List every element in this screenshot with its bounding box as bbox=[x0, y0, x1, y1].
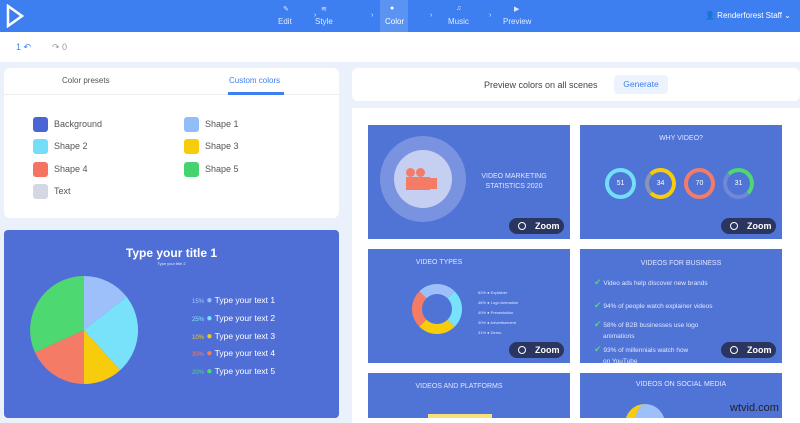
panel: pie preview: Type your title 1 bbox=[126, 246, 217, 260]
scene 1 bbox=[368, 125, 570, 239]
nav tabs: › bbox=[489, 12, 491, 19]
nav tabs: › bbox=[371, 12, 373, 19]
preview header: Preview colors on all scenes bbox=[484, 80, 598, 90]
scene 2: Zoom bbox=[747, 221, 772, 231]
panel: color settings: Shape 1 bbox=[205, 119, 239, 129]
toolbar undo/redo: ↷ 0 bbox=[52, 42, 67, 52]
nav tabs: Color bbox=[385, 17, 404, 26]
nav tabs: Music bbox=[448, 17, 469, 26]
scene 4: VIDEOS FOR BUSINESS bbox=[641, 260, 721, 267]
legend: 30% ● Type your text 4 bbox=[192, 348, 275, 359]
nav tabs: ✎ bbox=[283, 6, 289, 13]
panel: color settings: Background bbox=[54, 119, 102, 129]
header bar bbox=[0, 0, 800, 32]
nav tabs: ≋ bbox=[321, 6, 327, 13]
nav tabs: ♫ bbox=[456, 5, 461, 12]
panel: scenes bbox=[352, 108, 800, 423]
scene 3 bbox=[368, 249, 570, 363]
scene 6: VIDEOS ON SOCIAL MEDIA bbox=[636, 381, 726, 388]
scene 4: Zoom bbox=[747, 345, 772, 355]
scene 4: ✔ Video ads help discover new brands bbox=[594, 277, 708, 287]
toolbar undo/redo bbox=[0, 32, 800, 62]
toolbar undo/redo: 1 ↶ bbox=[16, 42, 31, 52]
scene 1: STATISTICS 2020 bbox=[486, 183, 542, 190]
panel: pie preview: Type your title 2 bbox=[157, 261, 186, 266]
nav tabs: › bbox=[314, 12, 316, 19]
scene 4: animations bbox=[603, 332, 634, 340]
scene 4: ✔ 58% of B2B businesses use logo bbox=[594, 319, 698, 329]
watermark: wtvid.com bbox=[730, 402, 779, 414]
preview header: Generate bbox=[623, 79, 659, 89]
scene 5 bbox=[368, 373, 570, 418]
user: 👤 Renderforest Staff ⌄ bbox=[705, 11, 791, 20]
legend bbox=[192, 295, 275, 377]
nav tabs: Preview bbox=[503, 17, 531, 26]
scene 3: 31% ● Demo bbox=[478, 330, 501, 335]
nav tabs: ▶ bbox=[514, 6, 519, 13]
scene 3: 62% ● Explainer bbox=[478, 290, 507, 295]
scene 5: VIDEOS AND PLATFORMS bbox=[416, 383, 502, 390]
legend: 20% ● Type your text 5 bbox=[192, 366, 275, 377]
panel: color settings: Shape 3 bbox=[205, 141, 239, 151]
scene 2: 70 bbox=[696, 180, 703, 187]
panel: pie preview bbox=[4, 230, 339, 418]
scene 2 bbox=[580, 125, 782, 239]
pie chart bbox=[30, 276, 138, 384]
panel: color settings: Shape 5 bbox=[205, 164, 239, 174]
scene 3: VIDEO TYPES bbox=[416, 259, 462, 266]
legend: 25% ● Type your text 2 bbox=[192, 313, 275, 324]
scene 1: Zoom bbox=[535, 221, 560, 231]
legend: 10% ● Type your text 3 bbox=[192, 331, 275, 342]
scene 3: Zoom bbox=[535, 345, 560, 355]
panel: color settings: Color presets bbox=[62, 76, 110, 85]
nav tabs: › bbox=[430, 12, 432, 19]
scene 3: 46% ● Logo Animation bbox=[478, 300, 518, 305]
scene 6 bbox=[580, 373, 782, 418]
panel: color settings: Custom colors bbox=[229, 76, 280, 85]
scene 1: VIDEO MARKETING bbox=[481, 173, 547, 180]
scene 2: 34 bbox=[657, 180, 664, 187]
scene 2: WHY VIDEO? bbox=[659, 135, 703, 142]
scene 2: 51 bbox=[617, 180, 624, 187]
preview header bbox=[352, 68, 800, 101]
nav tabs bbox=[278, 0, 532, 32]
panel: color settings: Text bbox=[54, 186, 71, 196]
scene 4: ✔ 94% of people watch explainer videos bbox=[594, 300, 712, 310]
legend: 15% ● Type your text 1 bbox=[192, 295, 275, 306]
scene 4: ✔ 93% of millennials watch how bbox=[594, 344, 688, 354]
panel: color settings: Shape 4 bbox=[54, 164, 88, 174]
panel: color settings: Shape 2 bbox=[54, 141, 88, 151]
scene 3: 40% ● Presentation bbox=[478, 310, 513, 315]
scene 2: 31 bbox=[735, 180, 742, 187]
scene 4 bbox=[580, 249, 782, 363]
panel: color settings bbox=[4, 68, 339, 218]
scene 3: 30% ● Advertisement bbox=[478, 320, 516, 325]
logo bbox=[6, 4, 24, 28]
nav tabs: Edit bbox=[278, 17, 292, 26]
nav tabs: Style bbox=[315, 17, 333, 26]
nav tabs: ● bbox=[390, 5, 394, 12]
